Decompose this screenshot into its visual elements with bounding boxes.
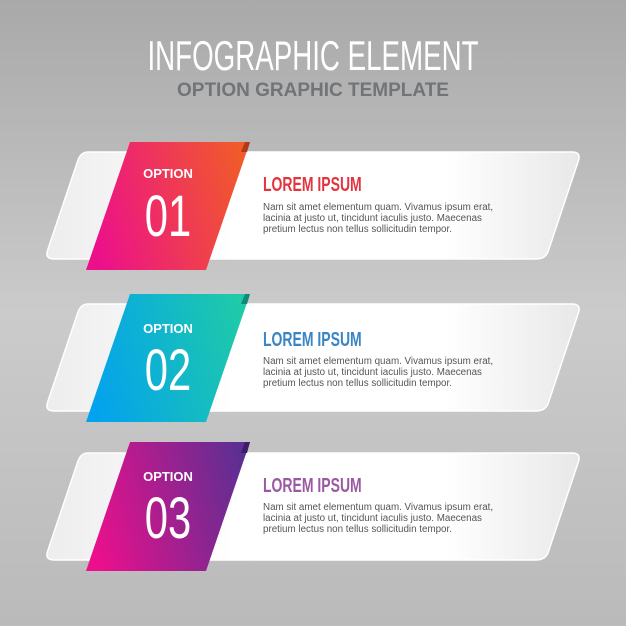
tag: OPTION xyxy=(143,166,193,181)
tag: OPTION xyxy=(143,321,193,336)
panel: option 02 xyxy=(47,294,579,422)
card xyxy=(47,152,579,259)
panel: option 01 xyxy=(47,142,579,270)
tag: 03 xyxy=(145,485,191,551)
card xyxy=(47,304,579,411)
heading: LOREM IPSUM xyxy=(263,172,362,196)
tag xyxy=(86,294,250,422)
body text: Nam sit amet elementum quam. Vivamus ipsum erat, xyxy=(263,502,493,513)
body text: Nam sit amet elementum quam. Vivamus ipsum erat, xyxy=(263,356,493,367)
card xyxy=(47,453,579,560)
heading: LOREM IPSUM xyxy=(263,327,362,351)
title: INFOGRAPHIC ELEMENT xyxy=(147,32,479,79)
heading: LOREM IPSUM xyxy=(263,473,362,497)
body text: lacinia at justo ut, tincidunt iaculis justo. Maecenas xyxy=(263,513,482,524)
tag: OPTION xyxy=(143,469,193,484)
body text: lacinia at justo ut, tincidunt iaculis justo. Maecenas xyxy=(263,213,482,224)
tag: 01 xyxy=(145,183,191,249)
body text: pretium lectus non tellus sollicitudin tempor. xyxy=(263,524,452,535)
panel: option 03 xyxy=(47,442,579,571)
tag xyxy=(86,142,250,270)
body text: Nam sit amet elementum quam. Vivamus ipsum erat, xyxy=(263,202,493,213)
body text: pretium lectus non tellus sollicitudin tempor. xyxy=(263,224,452,235)
tag xyxy=(86,442,250,571)
subtitle: OPTION GRAPHIC TEMPLATE xyxy=(177,80,449,101)
body text: pretium lectus non tellus sollicitudin tempor. xyxy=(263,378,452,389)
body text: lacinia at justo ut, tincidunt iaculis justo. Maecenas xyxy=(263,367,482,378)
tag: 02 xyxy=(145,337,191,403)
